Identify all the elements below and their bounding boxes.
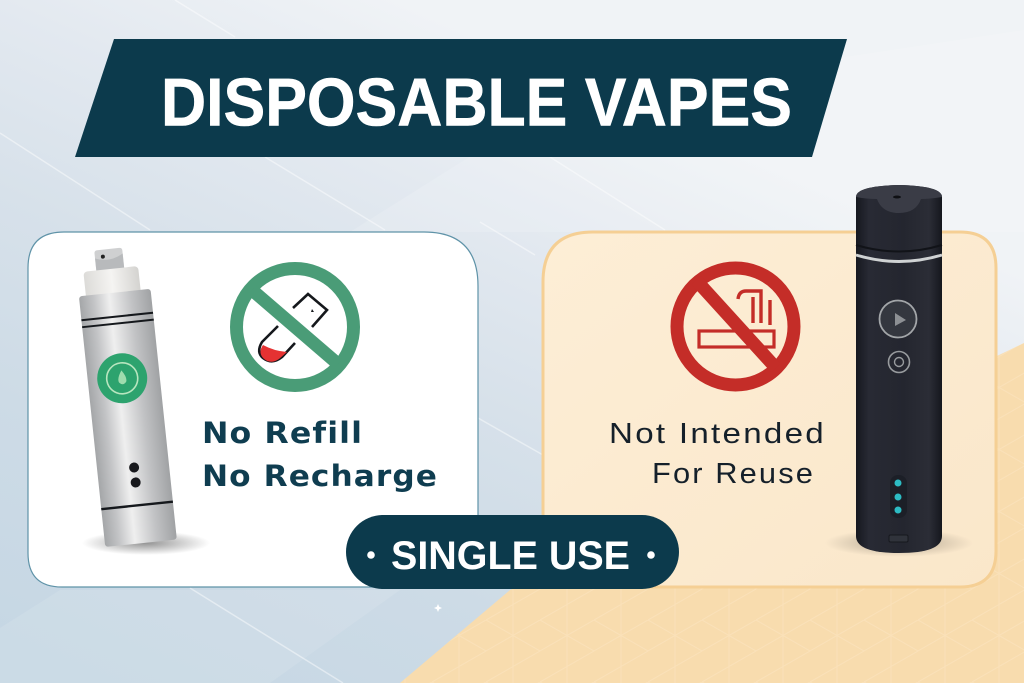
- label: no refill no recharge: [202, 416, 438, 493]
- title banner: [75, 39, 847, 157]
- peach patterned corner: [400, 343, 1024, 683]
- icon: no smoking sign: [677, 268, 794, 385]
- sparkle: [434, 604, 442, 612]
- label: no refill no recharge: No Recharge: [202, 459, 438, 493]
- icon: no refill sign: [236, 268, 354, 386]
- label: not intended for reuse: [609, 418, 826, 490]
- icon: black device: [825, 185, 973, 557]
- label: no refill no recharge: No Refill: [202, 416, 363, 450]
- icon: silver device: [74, 245, 210, 555]
- title: DISPOSABLE VAPES: [161, 64, 792, 140]
- badge: single use: [346, 515, 679, 589]
- label: not intended for reuse: For Reuse: [652, 458, 815, 490]
- panel: not intended for reuse: [543, 185, 996, 587]
- label: not intended for reuse: Not Intended: [609, 418, 826, 450]
- badge: single use: SINGLE USE: [391, 534, 630, 578]
- panel: no refill: [28, 232, 478, 587]
